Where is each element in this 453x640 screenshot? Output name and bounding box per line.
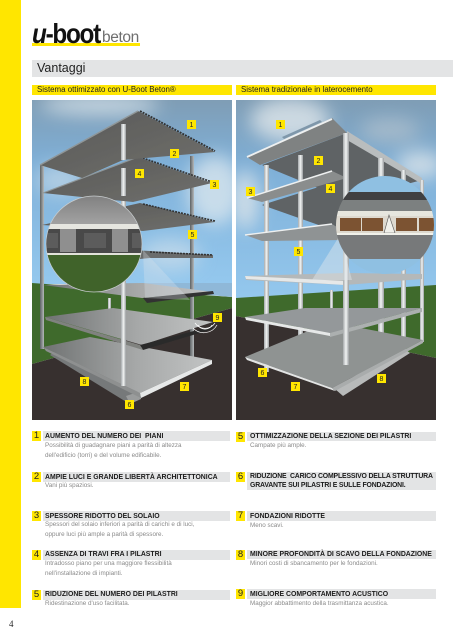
item 5 right: 5	[238, 431, 243, 442]
detail lens	[46, 196, 142, 292]
markers: numbered callouts: 7	[183, 384, 187, 391]
detail lens	[336, 176, 434, 274]
slab 3	[245, 224, 350, 241]
item 8 right	[236, 549, 436, 567]
markers: numbered callouts: 3	[249, 189, 253, 196]
left column	[40, 165, 44, 349]
item 5 left: Ridestinazione d'uso facilitata.	[45, 600, 130, 607]
slab 5	[245, 308, 422, 337]
markers: numbered callouts: 5	[297, 249, 301, 256]
column heading left	[32, 85, 232, 95]
item 9 right: MIGLIORE COMPORTAMENTO ACUSTICO	[250, 591, 388, 598]
item 6 right: RIDUZIONE CARICO COMPLESSIVO DELLA STRUTTURA GRAVANTE SUI PILASTRI E SULLE FONDAZIONI.	[250, 473, 433, 489]
item 7 right: Meno scavi.	[250, 522, 284, 529]
item 5 left: RIDUZIONE DEL NUMERO DEI PILASTRI	[45, 591, 178, 598]
right column	[190, 156, 194, 358]
item 5 right: OTTIMIZZAZIONE DELLA SEZIONE DEI PILASTRI	[250, 433, 411, 440]
center column upper part	[121, 124, 126, 160]
logo: beton	[102, 29, 139, 46]
illustration: optimized building	[32, 100, 232, 420]
item 1 left	[32, 430, 230, 459]
markers: numbered callouts: 6	[128, 402, 132, 409]
markers: numbered callouts: 8	[380, 376, 384, 383]
item 6 right: 6	[238, 471, 243, 482]
page number: 4	[9, 619, 14, 629]
solar strip	[282, 120, 322, 139]
item 4 left: ASSENZA DI TRAVI FRA I PILASTRI	[45, 551, 162, 558]
slab 5	[45, 308, 213, 350]
illustration: traditional building	[236, 100, 436, 420]
item 2 left: Vani più spaziosi.	[45, 482, 94, 489]
markers: numbered callouts: 1	[279, 122, 283, 129]
column heading right	[236, 85, 436, 95]
item 5 left	[32, 589, 230, 607]
item 2 left: 2	[34, 471, 39, 482]
sound wave icon	[193, 323, 217, 333]
item 1 left: Possibilità di guadagnare piani a parità di altezza dell'edificio (torri) e del volume edificabile.	[45, 442, 182, 459]
slab 1	[247, 118, 347, 165]
yellow side band	[0, 0, 21, 608]
item 1 left: AUMENTO DEL NUMERO DEI PIANI	[45, 433, 163, 440]
item 8 right: 8	[238, 549, 243, 560]
markers: numbered callouts: 2	[317, 158, 321, 165]
slab 2	[247, 171, 347, 202]
logo	[32, 18, 140, 49]
item 4 left: Intradosso piano per una maggiore flessibilità nell'installazione di impianti.	[45, 560, 172, 577]
lens beam	[312, 235, 352, 280]
slab 4	[43, 283, 214, 303]
item 9 right: Maggior abbattimento della trasmittanza acustica.	[250, 600, 389, 607]
slab 1	[40, 111, 215, 178]
markers: numbered callouts: 8	[83, 379, 87, 386]
item 5 left: 5	[34, 589, 39, 600]
item 8 right: Minori costi di sbancamento per le fondazioni.	[250, 560, 378, 567]
thin slab strip behind lens	[130, 250, 213, 260]
item 9 right	[236, 588, 436, 607]
horizon haze	[120, 283, 232, 297]
item 2 left: AMPIE LUCI E GRANDE LIBERTÀ ARCHITETTONICA	[45, 474, 218, 481]
columns	[264, 155, 424, 372]
markers: numbered callouts: 5	[191, 232, 195, 239]
ground slab	[43, 337, 212, 398]
green field	[236, 285, 436, 358]
item 8 right: MINORE PROFONDITÀ DI SCAVO DELLA FONDAZIONE	[250, 551, 432, 558]
slab 3	[42, 203, 215, 231]
markers: numbered callouts: 7	[294, 384, 298, 391]
item 7 right: FONDAZIONI RIDOTTE	[250, 513, 325, 520]
heading bar: Vantaggi: Vantaggi	[37, 61, 85, 75]
item 3 left	[32, 510, 230, 538]
markers: numbered callouts: 3	[213, 182, 217, 189]
back column	[108, 298, 111, 310]
markers: numbered callouts: 2	[173, 151, 177, 158]
item 5 right: Campate più ample.	[250, 442, 306, 449]
dark soil	[236, 316, 436, 420]
column heading left: Sistema ottimizzato con U-Boot Beton®	[37, 85, 176, 94]
sky	[32, 95, 243, 284]
markers: numbered callouts	[80, 120, 222, 409]
markers: numbered callouts	[246, 120, 386, 391]
heading bar: Vantaggi	[32, 60, 453, 77]
dark soil	[32, 308, 232, 420]
slab 4	[245, 273, 422, 285]
main column	[343, 133, 349, 365]
back frame	[262, 133, 422, 235]
item 9 right: 9	[238, 588, 243, 599]
lens beam	[143, 250, 190, 300]
markers: numbered callouts: 6	[261, 370, 265, 377]
item 3 left: 3	[34, 510, 39, 521]
foundation	[50, 347, 141, 403]
green field	[32, 283, 232, 364]
lens outline	[46, 196, 142, 292]
item 7 right	[236, 510, 436, 529]
foundation	[335, 346, 410, 396]
center column	[121, 196, 126, 386]
markers: numbered callouts: 4	[138, 171, 142, 178]
item 4 left: 4	[34, 549, 39, 560]
ground slab	[245, 322, 423, 391]
far side beam	[347, 131, 422, 184]
sky	[231, 98, 444, 300]
center column middle part	[121, 168, 126, 196]
slab 2	[43, 157, 212, 202]
markers: numbered callouts: 1	[190, 122, 194, 129]
item 1 left: 1	[34, 430, 39, 441]
item 2 left	[32, 471, 230, 489]
item 4 left	[32, 549, 230, 577]
item 3 left: SPESSORE RIDOTTO DEL SOLAIO	[45, 513, 160, 520]
item 5 right	[236, 431, 436, 449]
item 7 right: 7	[238, 510, 243, 521]
markers: numbered callouts: 9	[216, 315, 220, 322]
column heading right: Sistema tradizionale in laterocemento	[241, 85, 373, 94]
markers: numbered callouts: 4	[329, 186, 333, 193]
logo: u-boot	[32, 18, 100, 49]
item 3 left: Spessori del solaio inferiori a parità di carichi e di luci, oppure luci più ample a parità di spessore.	[45, 521, 194, 538]
